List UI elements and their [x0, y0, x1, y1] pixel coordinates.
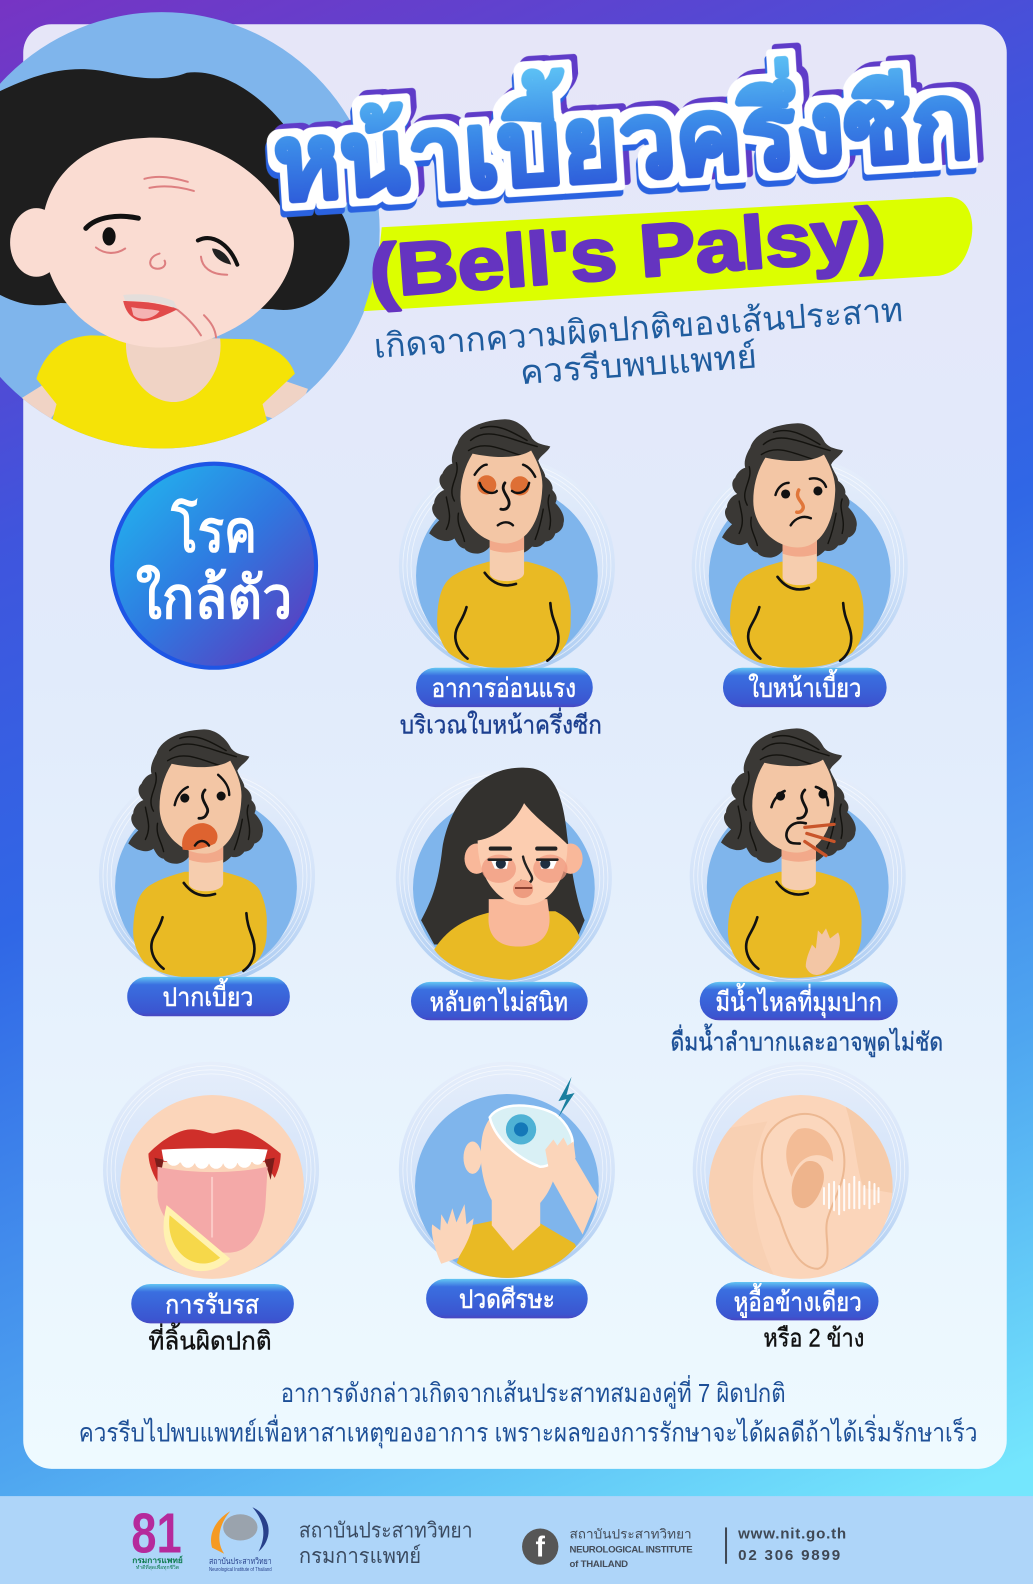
facebook page name: [570, 1527, 693, 1570]
label pill: [127, 977, 290, 1016]
label pill: หูอื้อข้างเดียว: [734, 1283, 862, 1318]
symptom: abnormal taste on tongue: [103, 1062, 319, 1356]
label pill: ปากเบี้ยว: [163, 978, 253, 1012]
organisation name: สถาบันประสาทวิทยา: [299, 1520, 473, 1543]
label pill: [716, 1282, 879, 1320]
closing advice text: [79, 1375, 977, 1449]
caption: ดื่มน้ำลำบากและอาจพูดไม่ชัด: [670, 1024, 943, 1058]
subtitle: Bell's Palsy: (Bell's Palsy): [367, 191, 888, 313]
symptom: headache: [399, 1062, 615, 1318]
caption: บริเวณใบหน้าครึ่งซีก: [400, 707, 602, 739]
symptom: hearing loss in one or both ears: [693, 1062, 909, 1353]
label pill: ใบหน้าเบี้ยว: [748, 669, 861, 703]
icon: facebook: f: [536, 1531, 546, 1563]
footer band: [0, 1496, 1033, 1584]
logo: 81st anniversary, Department of Medical Services: 81: [131, 1502, 182, 1565]
hero illustration: woman with facial palsy: [0, 12, 380, 465]
symptom: drooling, difficulty drinking and slurred speech: [670, 728, 943, 1058]
closing advice text: อาการดังกล่าวเกิดจากเส้นประสาทสมองคู่ที่ 7 ผิดปกติ: [281, 1375, 786, 1409]
symptom: drooping mouth: [99, 729, 315, 1016]
label pill: ปวดศีรษะ: [459, 1284, 555, 1314]
facebook page name: NEUROLOGICAL INSTITUTE: [570, 1545, 693, 1556]
symptom: eyes do not fully close: [396, 768, 612, 1020]
logo: Neurological Institute of Thailand: สถาบันประสาทวิทยา: [209, 1556, 272, 1566]
label pill: [426, 1279, 588, 1318]
label pill: หลับตาไม่สนิท: [430, 987, 568, 1017]
label pill: การรับรส: [165, 1289, 259, 1319]
label pill: [411, 982, 588, 1020]
symptom: weakness on half of face: [399, 419, 615, 739]
label pill: [416, 668, 593, 707]
label pill: [723, 668, 887, 707]
logo: 81st anniversary, Department of Medical Services: กรมการแพทย์: [132, 1555, 183, 1565]
label pill: อาการอ่อนแรง: [432, 673, 576, 703]
logo: Neurological Institute of Thailand: [209, 1507, 272, 1573]
icon: facebook: [522, 1528, 558, 1565]
caption: หรือ 2 ข้าง: [763, 1325, 864, 1353]
label pill: [700, 982, 898, 1020]
badge: common disease: ใกล้ตัว: [136, 565, 292, 631]
logo: 81st anniversary, Department of Medical Services: ทำดีที่สุดเพื่อทุกชีวิต: [136, 1564, 179, 1571]
contact details: [725, 1526, 846, 1564]
organisation name: กรมการแพทย์: [299, 1544, 421, 1568]
facebook page name: of THAILAND: [570, 1559, 628, 1570]
description text: ควรรีบพบแพทย์: [519, 339, 758, 392]
caption: ที่ลิ้นผิดปกติ: [148, 1323, 272, 1356]
symptom: facial droop: [692, 423, 908, 707]
badge: common disease: [112, 464, 316, 668]
badge: common disease: โรค: [171, 499, 257, 565]
label pill: มีน้ำไหลที่มุมปาก: [715, 983, 882, 1018]
facebook page name: สถาบันประสาทวิทยา: [570, 1527, 692, 1542]
label pill: [131, 1284, 294, 1323]
organisation name: [299, 1520, 473, 1568]
lime banner: [364, 197, 972, 311]
contact details: 02 306 9899: [738, 1547, 840, 1564]
description text: เกิดจากความผิดปกติของเส้นประสาท: [373, 292, 904, 366]
contact details: www.nit.go.th: [737, 1526, 846, 1543]
title: หน้าเบี้ยวครึ่งซีก: [270, 42, 976, 223]
logo: Neurological Institute of Thailand: Neurological Institute of Thailand: [209, 1567, 272, 1573]
